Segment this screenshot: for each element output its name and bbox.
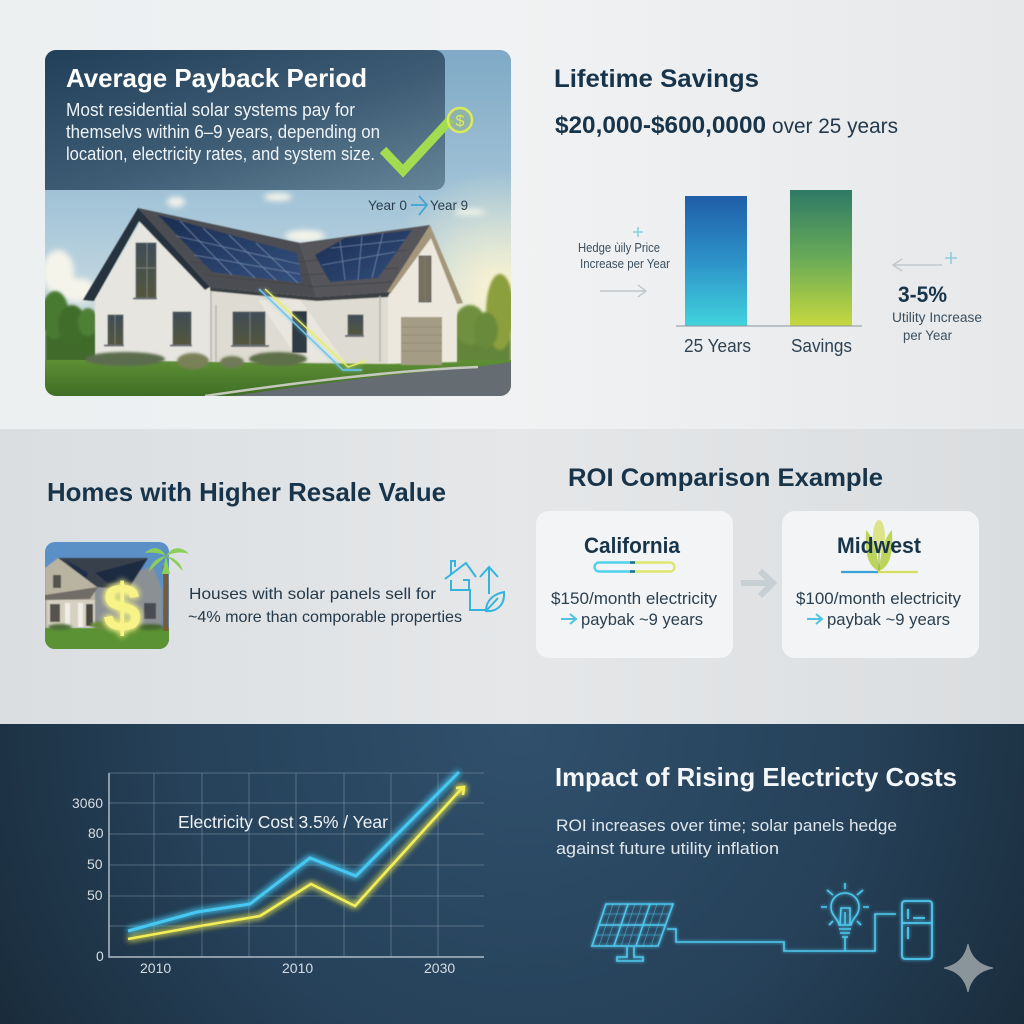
callout: hedge utility price: Increase per Year xyxy=(580,257,670,271)
walls xyxy=(95,222,210,362)
body text: ROI over time: ROI increases over time; solar panels hedge xyxy=(556,817,897,835)
savings amount xyxy=(555,112,898,139)
axis labels xyxy=(72,795,455,976)
left roof solar panels xyxy=(158,215,302,283)
body text: ROI over time: against future utility inflation xyxy=(556,840,779,858)
bar chart: Savings xyxy=(791,336,852,356)
panel: ROI comparison xyxy=(536,464,979,658)
callout: hedge utility price xyxy=(578,227,670,297)
axis labels: 3060 xyxy=(72,795,103,811)
chart label: Electricity Cost 3.5% / Year xyxy=(178,812,388,832)
icon: light bulb xyxy=(821,883,869,951)
windows xyxy=(108,243,431,345)
card: California: $150/month electricity xyxy=(551,589,717,608)
year 0 to year 9 label xyxy=(368,196,468,215)
card: California xyxy=(536,511,733,658)
callout: hedge utility price: Hedge ùily Price xyxy=(578,241,660,255)
wire connection xyxy=(667,914,896,951)
heading: impact of rising electricity costs: Impact of Rising Electricty Costs xyxy=(555,762,957,792)
panel: lifetime savings xyxy=(554,65,982,356)
body text xyxy=(66,100,380,164)
body text xyxy=(188,586,462,626)
text overlay card xyxy=(45,50,445,190)
axis labels: 80 xyxy=(88,825,104,841)
roofs xyxy=(138,208,317,297)
yellow series line with arrow xyxy=(128,787,464,939)
diagram: solar panel to appliances xyxy=(592,883,932,961)
callout: utility increase xyxy=(892,252,982,343)
heading: Homes with Higher Resale Value xyxy=(47,477,446,507)
photo: house with dollar sign xyxy=(45,542,189,649)
body text: Houses with solar panels sell for xyxy=(189,586,437,603)
heading: Average Payback Period xyxy=(66,63,367,93)
card: Midwest: Midwest xyxy=(837,533,922,558)
body text: themselvs within 6–9 years, depending on xyxy=(66,122,380,142)
icon: refrigerator xyxy=(902,901,932,959)
axis labels: 0 xyxy=(96,948,104,964)
icon: corn plant xyxy=(866,520,892,572)
right roof solar panels xyxy=(315,230,412,282)
icon: glowing dollar sign: $ xyxy=(103,570,141,646)
panel: higher resale value xyxy=(45,477,504,649)
section background: bottom dark xyxy=(0,724,1024,1024)
panel: average payback period xyxy=(41,50,514,396)
year 0 to year 9 label: Year 0 xyxy=(368,197,407,213)
body text: ROI over time xyxy=(556,817,897,858)
heading: ROI Comparison Example xyxy=(568,464,883,492)
house photo illustration xyxy=(41,50,514,396)
icon: palm tree xyxy=(145,548,189,631)
icon: checkmark with dollar coin: $ xyxy=(456,113,465,130)
card: California: California xyxy=(584,533,681,558)
icon: sparkle star xyxy=(944,944,993,992)
glowing savings lines xyxy=(259,289,366,370)
axis labels: 2010 xyxy=(282,960,313,976)
icon: split pill xyxy=(594,562,674,572)
axis labels: 50 xyxy=(87,856,103,872)
bar chart: 25 Years xyxy=(684,336,751,356)
axis labels: 2030 xyxy=(424,960,455,976)
icon: house with arrow and leaf xyxy=(445,561,504,611)
line chart: electricity cost xyxy=(72,772,484,976)
savings amount: over 25 years xyxy=(772,115,898,138)
callout: utility increase: per Year xyxy=(903,328,952,343)
icon: solar panel xyxy=(592,904,673,961)
section background: top xyxy=(0,0,1024,429)
body text: ~4% more than comporable properties xyxy=(188,609,462,626)
card: California: paybak ~9 years xyxy=(581,610,703,629)
callout: utility increase: 3-5% xyxy=(898,282,947,307)
card: Midwest: paybak ~9 years xyxy=(827,610,950,629)
body text: location, electricity rates, and system size. xyxy=(66,144,375,164)
card: Midwest: $100/month electricity xyxy=(796,589,961,608)
year 0 to year 9 label: Year 9 xyxy=(430,197,468,213)
card: Midwest xyxy=(782,511,979,658)
axis labels: 2010 xyxy=(140,960,171,976)
blue series line xyxy=(128,772,459,931)
savings amount: $20,000-$600,0000 xyxy=(555,112,766,139)
bar chart xyxy=(676,190,862,356)
section background: middle xyxy=(0,429,1024,724)
body text: Most residential solar systems pay for xyxy=(66,100,355,120)
heading: Lifetime Savings xyxy=(554,65,759,93)
icon: checkmark with dollar coin xyxy=(383,108,472,171)
arrow between cards xyxy=(741,571,773,596)
callout: utility increase: Utility Increase xyxy=(892,310,982,325)
axis labels: 50 xyxy=(87,887,103,903)
